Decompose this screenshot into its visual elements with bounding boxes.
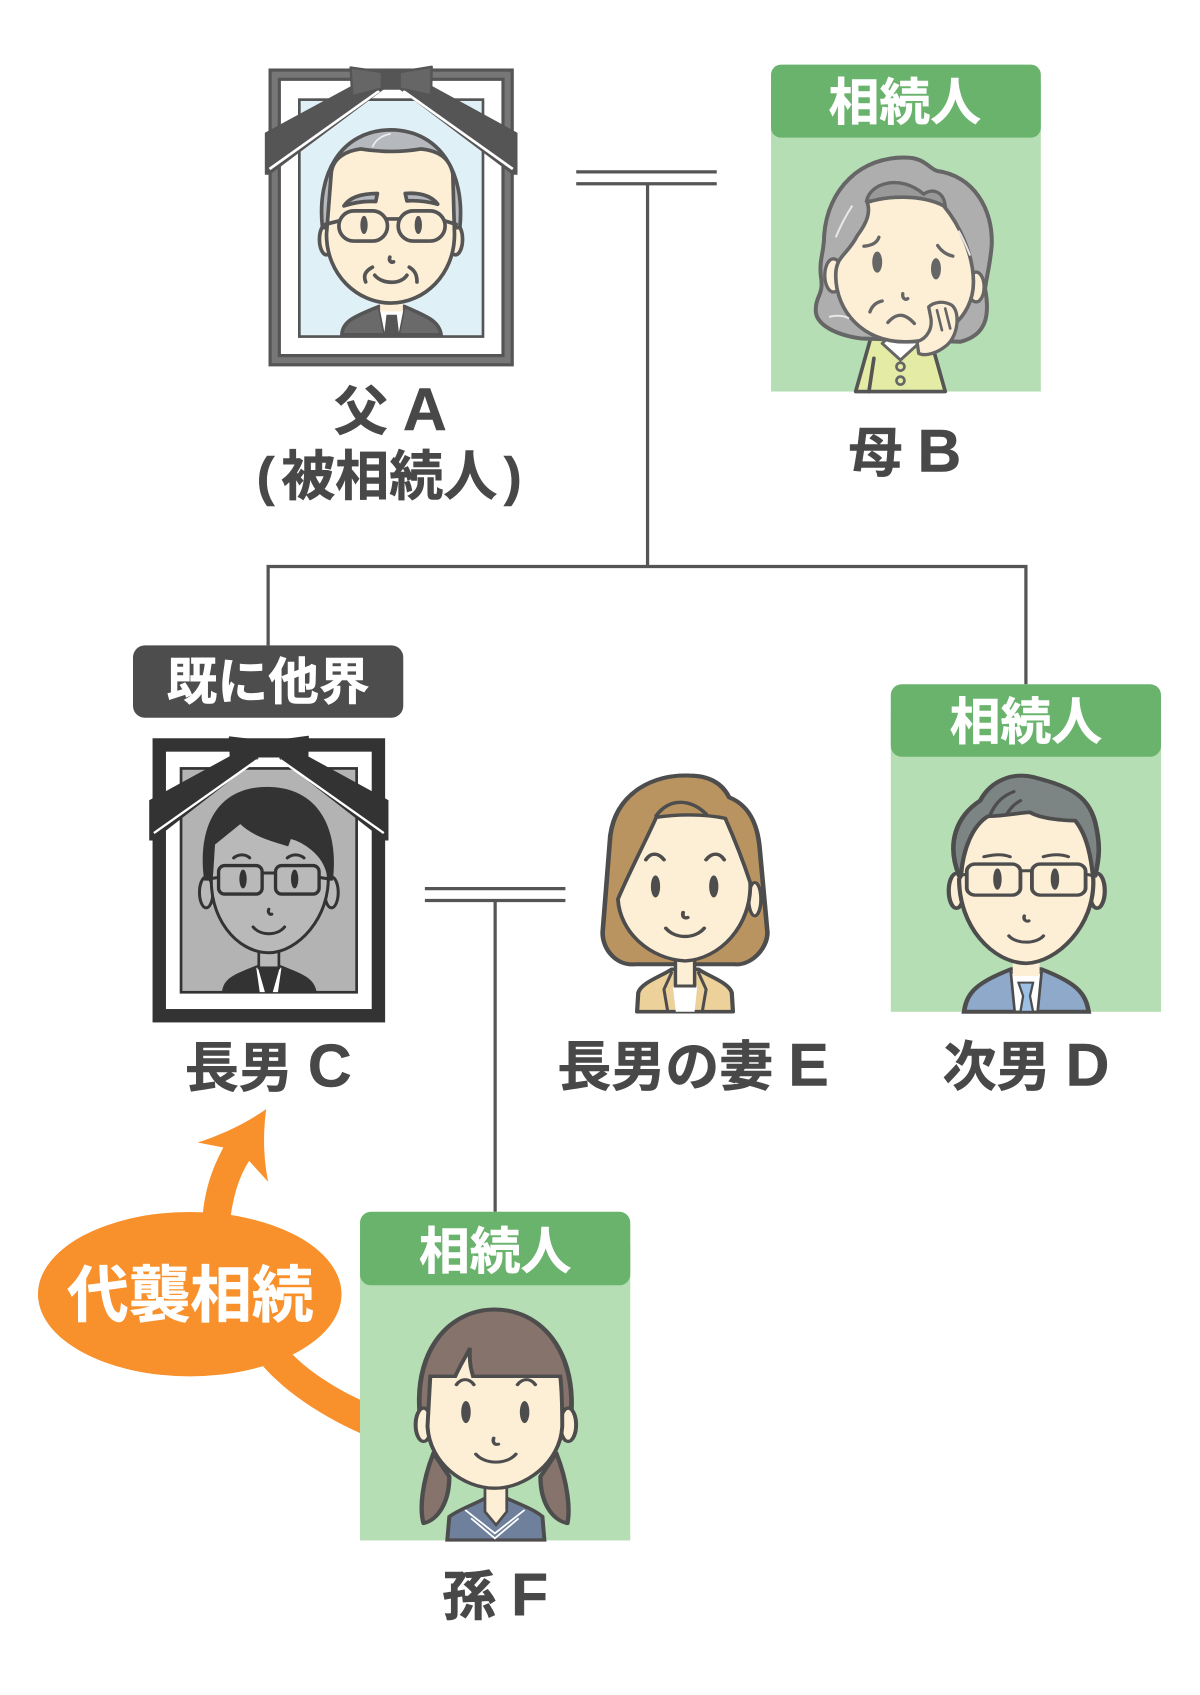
heir tag text: mother B: 相続人 bbox=[829, 74, 981, 131]
deceased tag: already passed away: 既に他界 bbox=[167, 653, 370, 710]
label: mother B: 母 B bbox=[848, 416, 961, 484]
man portrait bbox=[319, 130, 463, 335]
schoolgirl portrait bbox=[416, 1310, 576, 1540]
mourning ribbon bbox=[265, 67, 517, 174]
man in suit portrait bbox=[949, 776, 1105, 1012]
heir tag text: second son D: 相続人 bbox=[950, 693, 1102, 750]
connector lines: family tree bbox=[268, 172, 1026, 1212]
arrow up to eldest son C bbox=[198, 1109, 268, 1218]
card background bbox=[771, 83, 1041, 392]
label: second son D: 次男 D bbox=[943, 1030, 1109, 1098]
card background bbox=[360, 1243, 630, 1540]
panel: eldest son C memorial portrait bbox=[149, 737, 388, 1016]
frame bbox=[159, 745, 378, 1016]
label: eldest son C: 長男 C bbox=[185, 1031, 352, 1099]
panel: father A memorial portrait bbox=[265, 67, 517, 360]
label: father A: 父 A bbox=[334, 375, 447, 443]
label: deceased person: (被相続人) bbox=[257, 447, 522, 507]
card header bbox=[360, 1212, 630, 1285]
mourning ribbon bbox=[149, 737, 388, 840]
elderly woman portrait bbox=[816, 158, 992, 392]
callout: representation inheritance with arrows bbox=[38, 1109, 360, 1433]
portrait: wife E bbox=[603, 775, 767, 1012]
panel: mother B heir card bbox=[771, 65, 1041, 392]
panel: second son D heir card bbox=[891, 684, 1161, 1012]
card header bbox=[891, 684, 1161, 757]
deceased tag: already passed away bbox=[133, 645, 403, 718]
greyscale man portrait bbox=[199, 787, 338, 992]
label: grandchild F: 孫 F bbox=[442, 1560, 548, 1628]
panel: grandchild F heir card bbox=[360, 1212, 630, 1540]
card background bbox=[891, 713, 1161, 1012]
arrow tail from grandchild F bbox=[263, 1355, 360, 1433]
card header bbox=[771, 65, 1041, 138]
heir tag text: grandchild F: 相続人 bbox=[419, 1223, 571, 1280]
label: eldest son's wife E: 長男の妻 E bbox=[557, 1030, 829, 1098]
callout text: 代襲相続 bbox=[67, 1262, 314, 1331]
callout ellipse bbox=[38, 1212, 342, 1376]
frame bbox=[275, 75, 508, 360]
